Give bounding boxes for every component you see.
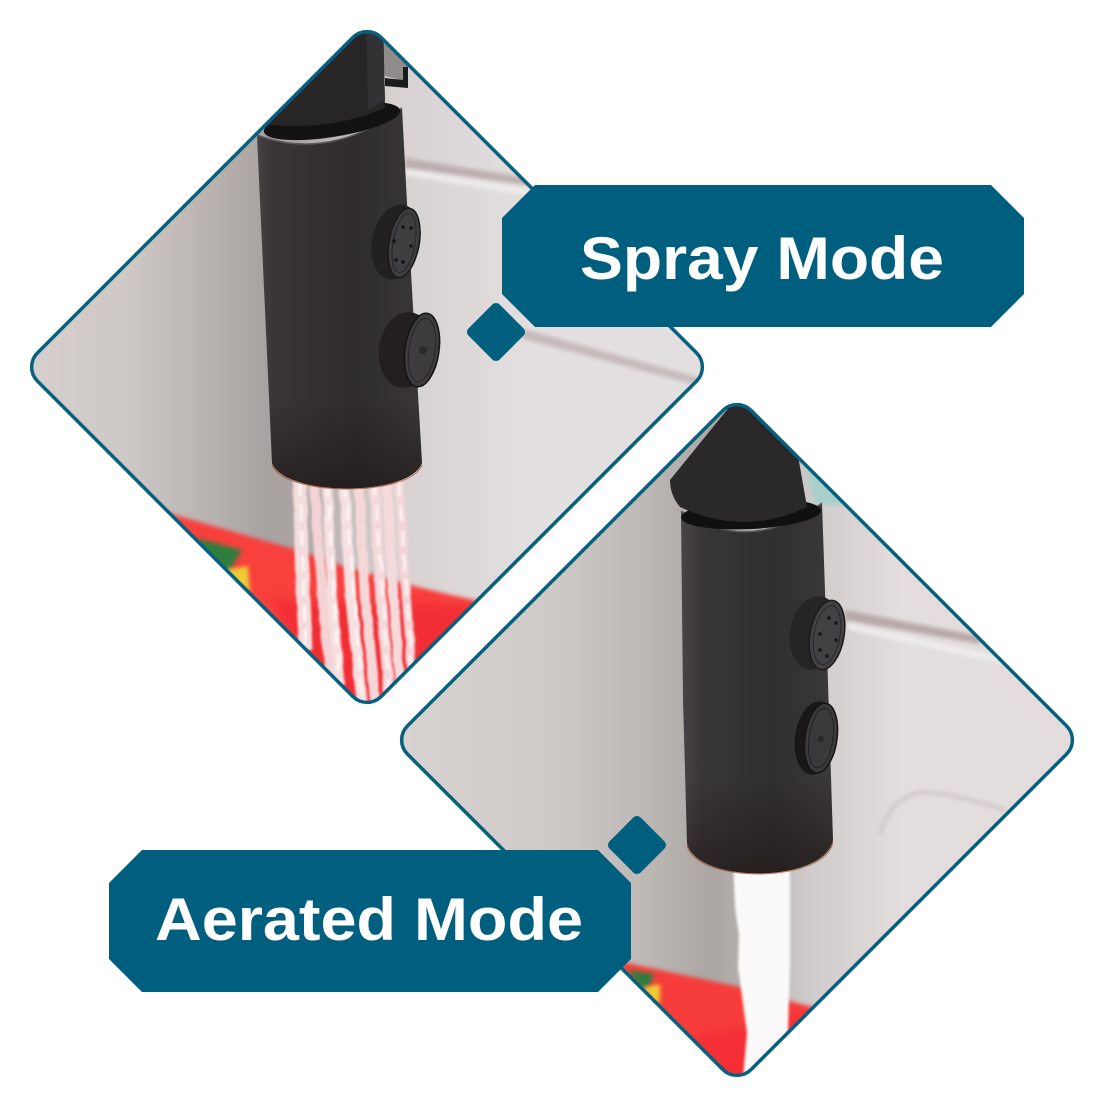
stream button [794,701,838,775]
aerated water column [733,860,790,1090]
photo background [33,67,700,602]
aerated panel border [393,396,1081,1084]
faucet neck [670,400,807,522]
red basin [170,510,477,638]
collar [264,102,400,140]
photo background [403,409,1070,1008]
spray water streams [300,478,412,710]
faucet neck [268,33,385,126]
label: aerated mode [109,850,631,992]
photo panel: aerated mode [390,390,1090,1090]
red basin [623,960,814,1043]
faucet body [257,108,422,488]
photo panel: spray mode [20,20,720,720]
faucet body [681,503,833,873]
label: aerated mode: Aerated Mode [155,886,583,953]
grey clip behind neck [384,42,408,80]
spray button [790,596,846,670]
label: spray mode [502,185,1024,327]
stream button [378,312,440,388]
spray button [371,204,421,280]
spray panel border [23,23,711,711]
label: spray mode: Spray Mode [580,225,944,292]
icon: aerated label diamond [606,814,668,876]
icon: spray label diamond [465,301,527,363]
collar [681,502,821,530]
